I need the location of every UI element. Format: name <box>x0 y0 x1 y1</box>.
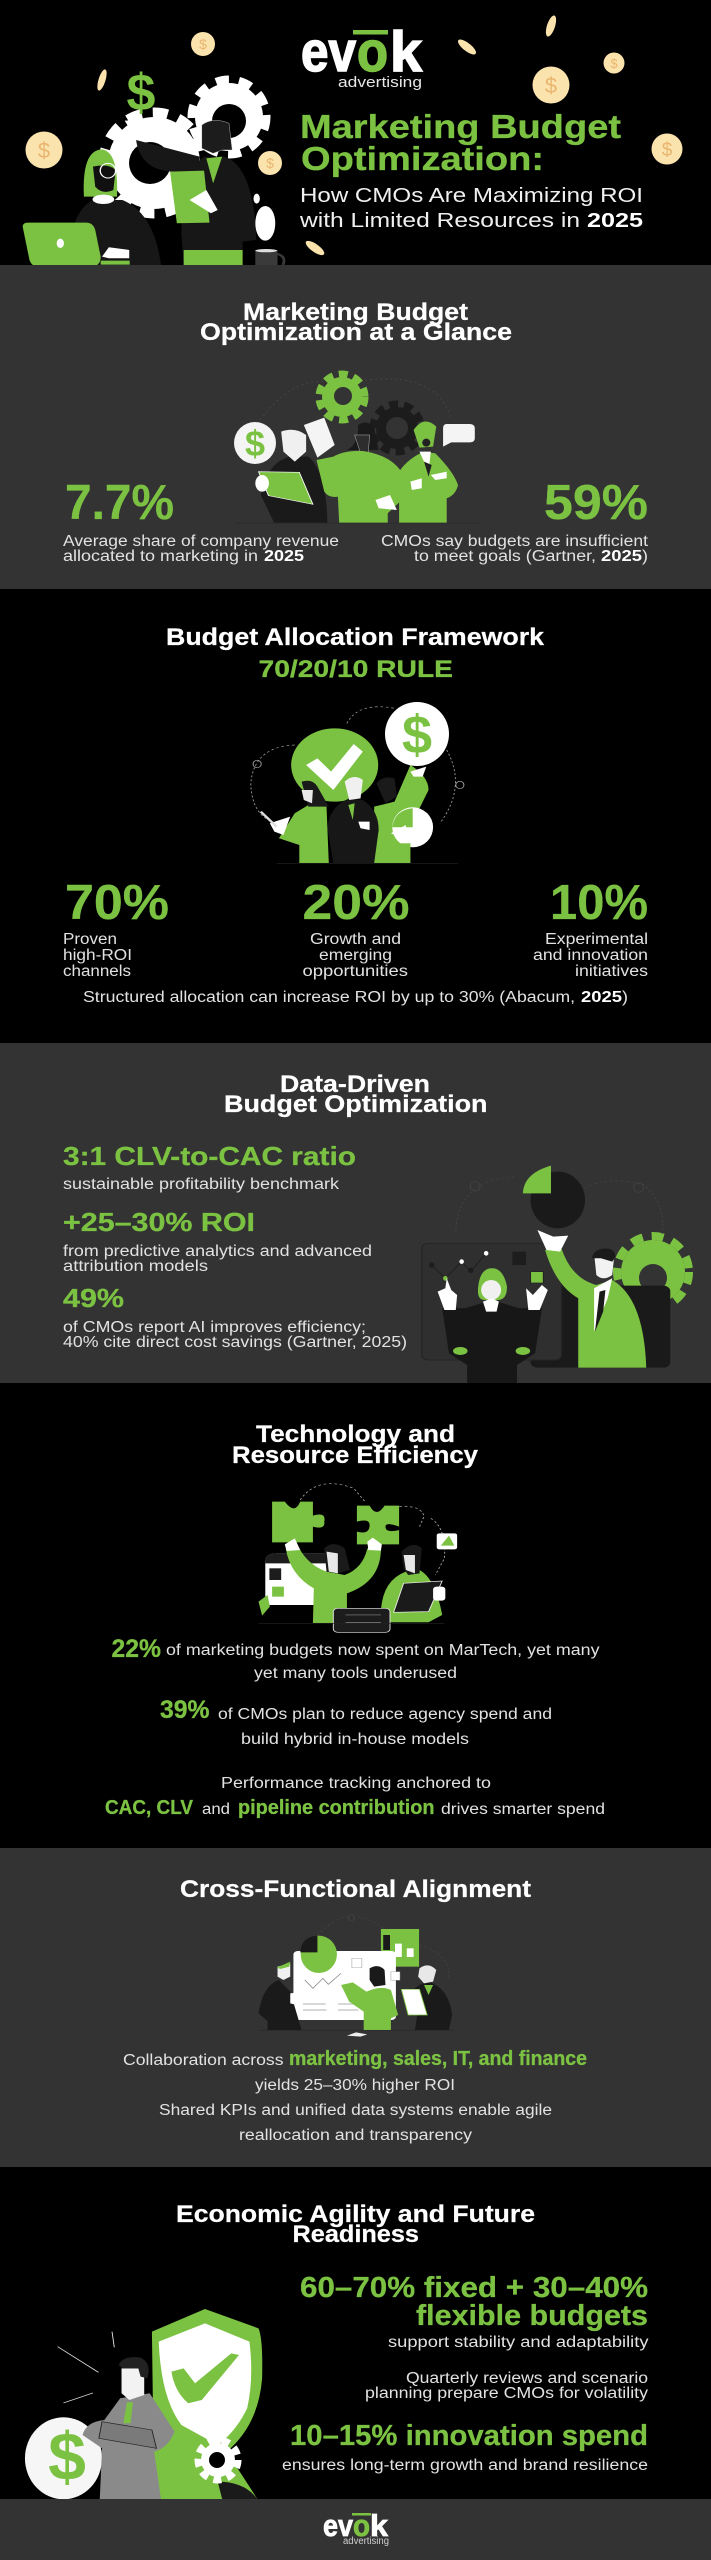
stat: 70%: 70% <box>65 876 169 930</box>
text: collaboration <box>123 2048 587 2144</box>
stat: 49%: of CMOs report AI improves efficiency; <box>63 1319 366 1336</box>
figures <box>251 707 464 864</box>
heading <box>176 2201 535 2248</box>
illustration: team with puzzle pieces <box>258 1484 457 1632</box>
text: collaboration: marketing, sales, IT, and finance <box>289 2048 587 2070</box>
icons: floating coins: $ <box>662 140 673 161</box>
stat: 20% <box>302 876 410 980</box>
stat: fixed and flexible budgets: 60–70% fixed + 30–40% <box>300 2272 648 2304</box>
stat: 10%: 10% <box>550 876 648 930</box>
stat: 7.7%: Average share of company revenue <box>63 533 339 550</box>
stat: innovation spend <box>282 2420 648 2474</box>
logo: evok advertising: advertising <box>343 2536 389 2547</box>
text: agency spend stat: 39% <box>160 1696 210 1724</box>
stat: 7.7%: allocated to marketing in <box>63 548 258 565</box>
stat: 20%: emerging <box>319 947 392 964</box>
icon: dark gear <box>373 404 421 452</box>
stat: ROI lift <box>63 1207 372 1275</box>
icon: dollar sign: $ <box>127 64 156 122</box>
stat: ROI lift: +25–30% ROI <box>63 1207 255 1237</box>
heading: Budget Optimization <box>224 1091 488 1118</box>
illustration: analysts with pie chart <box>422 1166 689 1383</box>
text: quarterly reviews <box>365 2370 648 2402</box>
panel: cross-functional alignment <box>0 1848 711 2167</box>
icon: small gear <box>192 80 266 154</box>
text: collaboration: reallocation and transparency <box>239 2127 472 2144</box>
text: allocation note: ) <box>622 989 628 1006</box>
panel: footer <box>0 2499 711 2560</box>
text: performance tracking: Performance tracking anchored to <box>221 1775 491 1792</box>
stat: 59%: CMOs say budgets are insufficient <box>381 533 649 550</box>
icon: dollar coin <box>234 422 276 464</box>
text: performance tracking: CAC, CLV <box>105 1797 194 1819</box>
logo: evok advertising: k <box>370 2508 389 2543</box>
text: performance tracking: and <box>202 1801 230 1818</box>
illustration: two marketers with gears <box>23 64 284 267</box>
stat: 20%: Growth and <box>310 931 401 948</box>
stat: 7.7%: 2025 <box>264 548 304 565</box>
logo: evok advertising: o <box>357 20 388 84</box>
text: performance tracking: drives smarter spend <box>441 1801 605 1818</box>
stat: 59% <box>381 476 649 565</box>
text: allocation note: 2025 <box>581 989 622 1006</box>
heading: 70/20/10 RULE <box>258 656 453 683</box>
stat: 49% <box>63 1283 407 1351</box>
stat: ROI lift: attribution models <box>63 1258 208 1275</box>
stat: 10%: and innovation <box>533 947 648 964</box>
text: agency spend stat <box>160 1696 552 1748</box>
subtitle: with Limited Resources in <box>299 209 580 232</box>
text: agency spend stat: of CMOs plan to reduce agency spend and <box>218 1706 552 1723</box>
text: collaboration: Shared KPIs and unified data systems enable agile <box>159 2102 552 2119</box>
figures <box>23 120 284 267</box>
logo: evok advertising: k <box>390 20 422 84</box>
icons: floating coins: $ <box>266 155 274 171</box>
logo: evok advertising <box>323 2508 389 2547</box>
stat: CLV-to-CAC: sustainable profitability benchmark <box>63 1176 339 1193</box>
heading: Cross-Functional Alignment <box>180 1876 531 1903</box>
stat: 20%: 20% <box>302 876 410 930</box>
stat: fixed and flexible budgets <box>300 2272 649 2351</box>
text: quarterly reviews: Quarterly reviews and scenario <box>406 2370 648 2387</box>
stat: 49%: 40% cite direct cost savings (Gartner, 2025) <box>63 1334 407 1351</box>
stat: fixed and flexible budgets: flexible budgets <box>416 2300 648 2332</box>
panel: at a glance <box>0 265 711 589</box>
heading <box>200 299 512 346</box>
icons: floating coins: $ <box>38 138 50 163</box>
stat: 10%: Experimental <box>545 931 648 948</box>
subtitle: 2025 <box>587 209 643 232</box>
panel: technology and resource efficiency <box>0 1383 711 1848</box>
illustration: team with check and coin <box>251 702 464 864</box>
heading: Economic Agility and Future <box>176 2201 535 2228</box>
icon: dollar coin: $ <box>245 423 265 464</box>
figures <box>236 418 481 524</box>
stat: 59%: 2025 <box>601 548 642 565</box>
stat: CLV-to-CAC <box>63 1141 356 1193</box>
text: allocation note: Structured allocation can increase ROI by up to 30% (Abacum, <box>83 989 575 1006</box>
heading <box>232 1421 479 1469</box>
icon: dollar sign: $ <box>48 2419 86 2495</box>
heading <box>224 1071 488 1118</box>
text: quarterly reviews: planning prepare CMOs for volatility <box>365 2385 648 2402</box>
illustration: team at whiteboard <box>258 1915 454 2037</box>
icons: floating coins: $ <box>199 36 207 52</box>
title: Optimization: <box>301 140 544 177</box>
heading: Data-Driven <box>280 1071 430 1098</box>
heading: Readiness <box>292 2221 419 2248</box>
logo: evok advertising: o <box>353 2508 370 2543</box>
text: collaboration: Collaboration across <box>123 2052 284 2069</box>
panel: data-driven optimization <box>0 1043 711 1383</box>
stat: fixed and flexible budgets: support stability and adaptability <box>388 2334 649 2351</box>
heading <box>166 624 545 683</box>
text: collaboration: yields 25–30% higher ROI <box>255 2077 455 2094</box>
icons: floating coins: $ <box>545 73 557 98</box>
stat: ROI lift: from predictive analytics and advanced <box>63 1243 372 1260</box>
text: agency spend stat: build hybrid in-house models <box>241 1731 469 1748</box>
heading: Technology and <box>256 1421 455 1448</box>
subtitle: How CMOs Are Maximizing ROI <box>300 184 643 207</box>
logo: evok advertising: advertising <box>338 74 422 91</box>
stat: 70%: high-ROI <box>63 947 132 964</box>
icon: green gear <box>617 1236 689 1308</box>
panel: budget allocation framework <box>0 589 711 1043</box>
panel: header <box>0 0 711 267</box>
figures <box>25 2309 262 2499</box>
text: MarTech stat <box>112 1635 600 1682</box>
logo: evok advertising: ev <box>323 2508 354 2543</box>
stat: innovation spend: 10–15% innovation spend <box>290 2420 648 2452</box>
logo: evok advertising: ev <box>301 20 356 84</box>
heading: Marketing Budget <box>243 299 468 326</box>
icon: large gear <box>104 113 204 213</box>
illustration: team with gears <box>234 374 481 524</box>
stat: innovation spend: ensures long-term growth and brand resilience <box>282 2457 648 2474</box>
icon: green gear <box>319 374 365 420</box>
stat: 59%: ) <box>642 548 648 565</box>
icon: dollar coin: $ <box>402 705 432 765</box>
text: MarTech stat: yet many tools underused <box>254 1665 457 1682</box>
stat: CLV-to-CAC: 3:1 CLV-to-CAC ratio <box>63 1141 356 1171</box>
stat: 7.7%: 7.7% <box>65 476 174 530</box>
title <box>300 108 621 177</box>
icon: dollar coin <box>385 702 449 766</box>
logo: evok advertising <box>301 20 422 91</box>
text: MarTech stat: of marketing budgets now spent on MarTech, yet many <box>166 1642 600 1659</box>
text: performance tracking: pipeline contribution <box>238 1797 434 1819</box>
title: Marketing Budget <box>300 108 621 145</box>
text: performance tracking <box>105 1775 605 1819</box>
stat: 59%: 59% <box>544 476 648 530</box>
subtitle <box>299 184 643 232</box>
icon: white gear <box>198 2440 238 2480</box>
icons: floating coins: $ <box>610 56 618 71</box>
stat: 59%: to meet goals (Gartner, <box>414 548 596 565</box>
panel: economic agility <box>0 2167 711 2499</box>
stat: 7.7% <box>63 476 339 565</box>
icons: floating coins <box>26 14 682 258</box>
illustration: executive with shield <box>25 2309 262 2499</box>
stat: 70%: Proven <box>63 931 117 948</box>
stat: 20%: opportunities <box>302 963 408 980</box>
heading: Resource Efficiency <box>232 1442 479 1469</box>
text: MarTech stat: 22% <box>112 1635 161 1663</box>
stat: 70% <box>63 876 169 980</box>
stat: 49%: 49% <box>63 1283 124 1313</box>
heading: Optimization at a Glance <box>200 319 512 346</box>
heading: Budget Allocation Framework <box>166 624 545 651</box>
stat: 10% <box>533 876 648 980</box>
stat: 10%: initiatives <box>575 963 648 980</box>
stat: 70%: channels <box>63 963 131 980</box>
figures <box>422 1166 670 1383</box>
